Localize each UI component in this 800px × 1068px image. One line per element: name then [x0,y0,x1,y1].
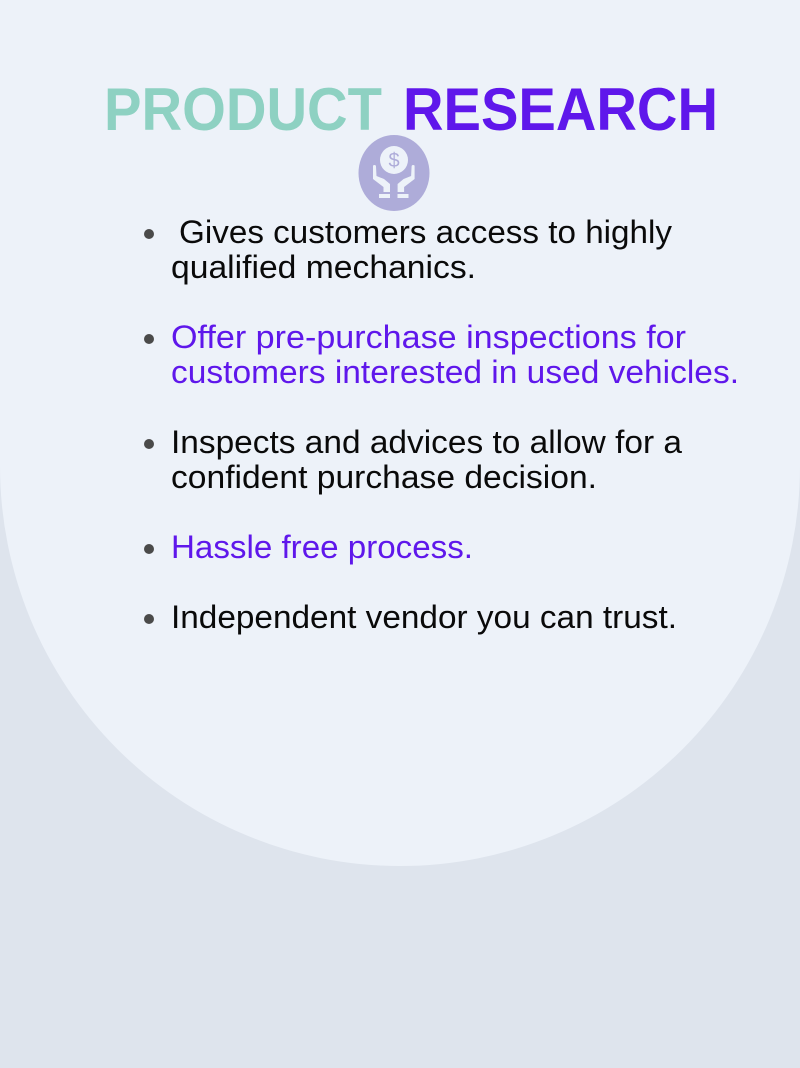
list item: pre-purchase inspections: Offer pre-purchase inspections for [171,319,686,355]
list item: qualified mechanics [144,214,672,285]
title: RESEARCH [403,76,718,143]
list item: pre-purchase inspections [144,319,739,390]
list item: qualified mechanics: Gives customers access to highly [179,214,672,250]
list item: qualified mechanics: qualified mechanics. [171,249,476,285]
bullet list [144,214,739,635]
title [104,76,718,143]
list item: hassle free: Hassle free process. [171,529,473,565]
icon: hands holding dollar coin: $ [388,150,400,172]
title: PRODUCT [104,76,382,143]
list item: confident purchase decision: Inspects and advices to allow for a [171,424,682,460]
list item: confident purchase decision: confident purchase decision. [171,459,597,495]
list item: independent vendor: Independent vendor you can trust. [171,599,677,635]
list item: confident purchase decision [144,424,682,495]
list item: pre-purchase inspections: customers interested in used vehicles. [171,354,739,390]
icon: hands holding dollar coin [358,135,430,211]
